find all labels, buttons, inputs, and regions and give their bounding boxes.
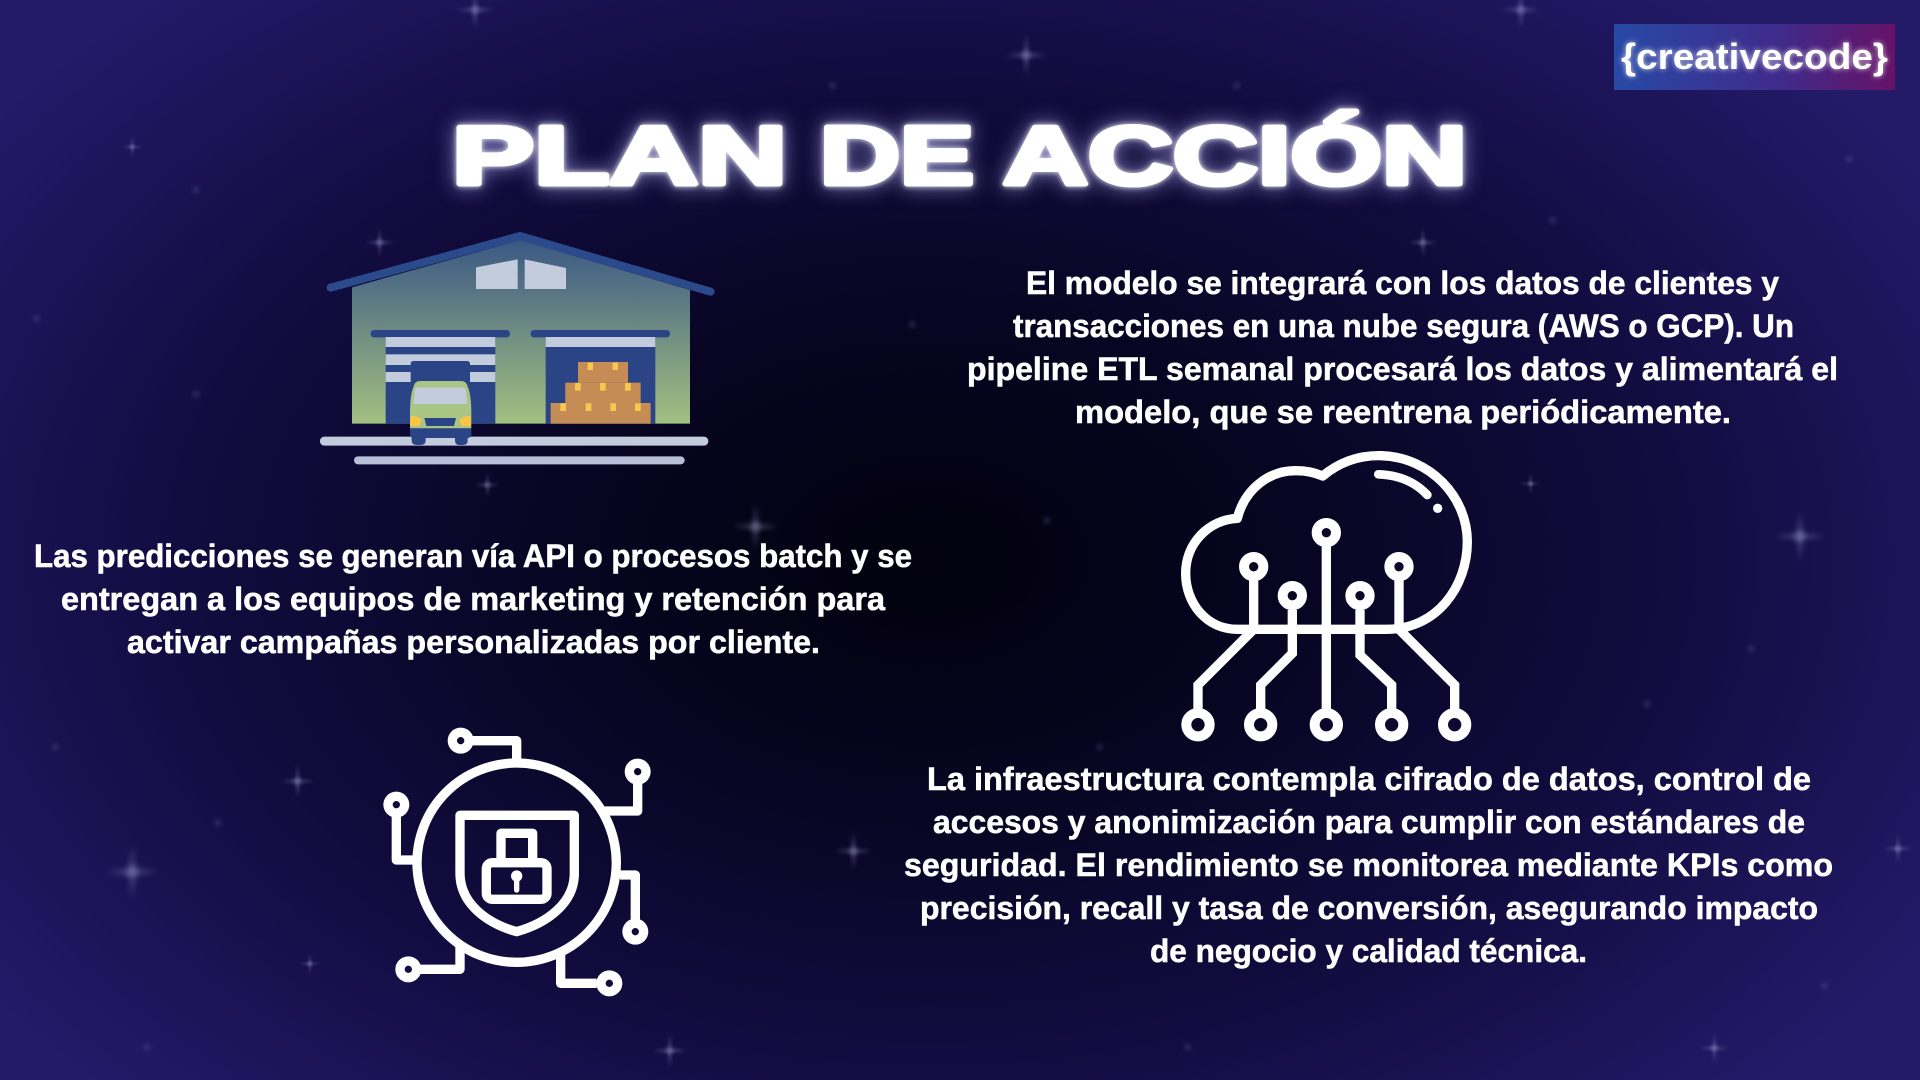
text: cloud integration: modelo, que se reentrena periódicamente. xyxy=(1075,394,1731,430)
text: predictions delivery: activar campañas personalizadas por cliente. xyxy=(127,624,820,660)
text: cloud integration: pipeline ETL semanal procesará los datos y alimentará el xyxy=(967,351,1838,387)
icon: warehouse xyxy=(320,236,711,464)
text: cloud integration: El modelo se integrará con los datos de clientes y xyxy=(1026,265,1779,301)
text: predictions delivery xyxy=(34,538,912,660)
logo: creativecode: {creativecode} xyxy=(1621,36,1888,77)
text: predictions delivery: Las predicciones se generan vía API o procesos batch y se xyxy=(34,538,912,574)
icon: cloud circuit xyxy=(1186,456,1467,736)
title: ACCIÓN xyxy=(1003,109,1467,202)
title: PLAN xyxy=(452,109,787,202)
text: cloud integration: transacciones en una nube segura (AWS o GCP). Un xyxy=(1013,308,1794,344)
logo: creativecode xyxy=(1614,24,1895,90)
text: cloud integration xyxy=(967,265,1838,430)
text: security and monitoring xyxy=(904,761,1833,969)
text: security and monitoring: seguridad. El rendimiento se monitorea mediante KPIs como xyxy=(904,847,1833,883)
text: security and monitoring: La infraestructura contempla cifrado de datos, control de xyxy=(927,761,1811,797)
title xyxy=(452,109,1467,202)
text: security and monitoring: precisión, recall y tasa de conversión, asegurando impacto xyxy=(920,890,1818,926)
title: DE xyxy=(820,109,974,202)
text: predictions delivery: entregan a los equipos de marketing y retención para xyxy=(61,581,885,617)
icon: security shield xyxy=(388,732,646,992)
text: security and monitoring: accesos y anonimización para cumplir con estándares de xyxy=(933,804,1805,840)
text: security and monitoring: de negocio y calidad técnica. xyxy=(1150,933,1587,969)
